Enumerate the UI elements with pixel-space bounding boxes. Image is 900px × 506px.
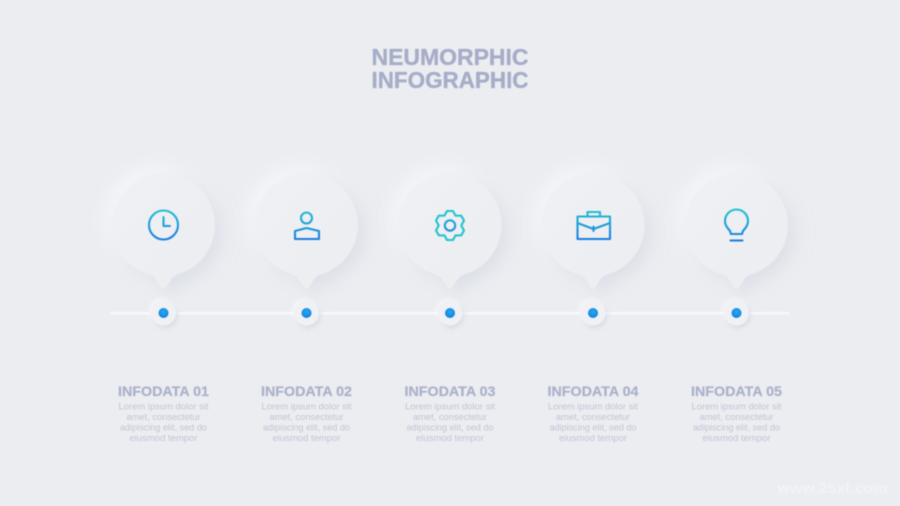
label 1: Lorem ipsum dolor sit bbox=[118, 402, 209, 412]
label 3: amet, consectetur bbox=[413, 412, 488, 423]
label 2: adipiscing elit, sed do bbox=[263, 422, 350, 434]
label 5: INFODATA 05 bbox=[691, 383, 782, 399]
label 1: INFODATA 01 bbox=[118, 383, 209, 399]
title: NEUMORPHIC bbox=[372, 44, 528, 70]
label 4 bbox=[548, 383, 639, 444]
label 4: eiusmod tempor bbox=[559, 433, 628, 444]
pin bubble 1 bbox=[112, 174, 215, 289]
label 3: eiusmod tempor bbox=[416, 433, 485, 444]
label 2: INFODATA 02 bbox=[261, 383, 352, 399]
step 2 bbox=[255, 174, 358, 444]
title: INFOGRAPHIC bbox=[372, 67, 528, 93]
icon: clock bbox=[149, 210, 178, 240]
pin bubble 2 bbox=[255, 174, 358, 289]
label 4: Lorem ipsum dolor sit bbox=[548, 402, 638, 412]
icon: gear bbox=[436, 211, 464, 240]
step 1 bbox=[112, 174, 215, 444]
label 3: INFODATA 03 bbox=[404, 383, 496, 399]
label 2: eiusmod tempor bbox=[272, 433, 341, 444]
label 5: Lorem ipsum dolor sit bbox=[692, 402, 782, 412]
label 4: adipiscing elit, sed do bbox=[550, 422, 636, 434]
label 1: eiusmod tempor bbox=[130, 433, 198, 444]
step 3 bbox=[398, 174, 502, 444]
icon: light bulb bbox=[725, 210, 748, 240]
label 3 bbox=[404, 383, 496, 444]
title bbox=[372, 44, 528, 93]
label 5: adipiscing elit, sed do bbox=[693, 422, 780, 434]
timeline node 1 bbox=[151, 300, 176, 326]
label 5: eiusmod tempor bbox=[702, 433, 771, 444]
label 5 bbox=[691, 383, 782, 444]
label 1: adipiscing elit, sed do bbox=[120, 422, 207, 434]
pin bubble 4 bbox=[542, 174, 644, 289]
watermark: www.25xt.com bbox=[776, 481, 888, 497]
label 3: adipiscing elit, sed do bbox=[406, 422, 494, 434]
icon: briefcase bbox=[578, 212, 610, 239]
label 2: amet, consectetur bbox=[270, 412, 344, 423]
icon: person bbox=[295, 212, 319, 239]
label 2: Lorem ipsum dolor sit bbox=[262, 402, 352, 412]
timeline node 2 bbox=[294, 300, 319, 326]
label 2 bbox=[261, 383, 352, 444]
timeline node 3 bbox=[438, 300, 462, 326]
pin bubble 3 bbox=[398, 174, 502, 289]
timeline node 4 bbox=[580, 300, 606, 326]
label 3: Lorem ipsum dolor sit bbox=[405, 402, 495, 412]
label 4: amet, consectetur bbox=[556, 412, 631, 423]
label 5: amet, consectetur bbox=[700, 412, 774, 423]
label 4: INFODATA 04 bbox=[548, 383, 639, 399]
label 1: amet, consectetur bbox=[126, 412, 201, 423]
step 5 bbox=[685, 174, 788, 444]
timeline line bbox=[110, 312, 790, 314]
pin bubble 5 bbox=[685, 174, 788, 289]
label 1 bbox=[118, 383, 209, 444]
step 4 bbox=[542, 174, 645, 444]
timeline node 5 bbox=[724, 300, 749, 326]
